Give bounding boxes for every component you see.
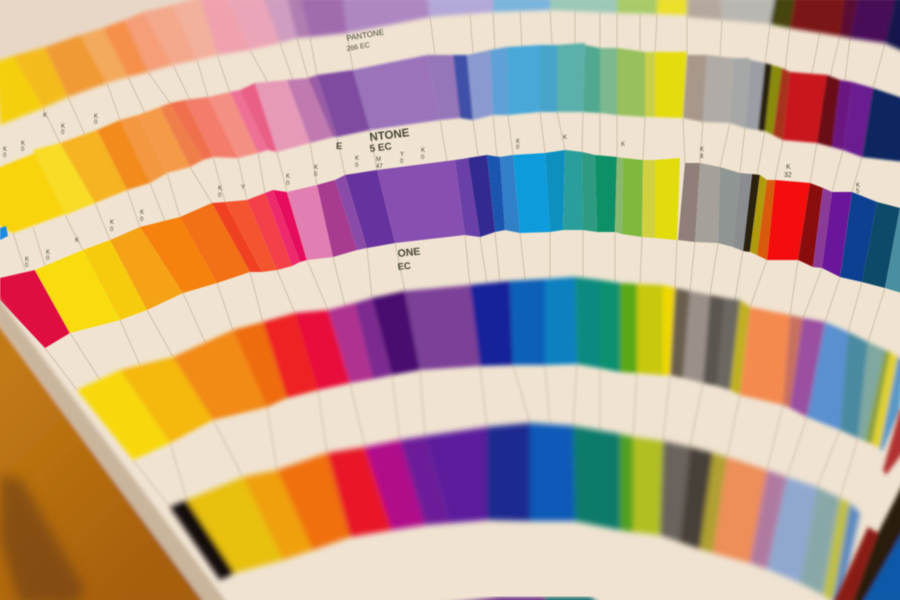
- swatch labels: pantone names: PANTONE: [346, 28, 385, 43]
- swatch labels: cmyk values: 0: [94, 120, 98, 126]
- swatch labels: cmyk values: 47: [376, 164, 383, 170]
- swatch labels: cmyk values: K: [516, 139, 520, 145]
- swatch labels: cmyk values: K: [421, 148, 425, 154]
- swatch labels: cmyk values: 0: [25, 263, 29, 269]
- swatch labels: cmyk values: M: [376, 157, 381, 163]
- swatch labels: cmyk values: K: [856, 183, 860, 189]
- swatch labels: pantone names: 266 EC: [346, 42, 370, 53]
- swatch labels: cmyk values: 0: [46, 256, 50, 262]
- swatch labels: pantone names: ONE: [397, 246, 421, 260]
- swatch labels: pantone names: E: [336, 141, 342, 152]
- swatch labels: pantone names: 5 EC: [369, 141, 392, 155]
- swatch labels: cmyk values: K: [110, 220, 114, 226]
- swatch labels: cmyk values: Y: [400, 152, 404, 158]
- swatch labels: cmyk values: K: [21, 141, 25, 147]
- colour row A: top row: [0, 0, 900, 125]
- book cover: lower left: [0, 294, 228, 600]
- colour row C: third row: [0, 150, 900, 348]
- swatch labels: cmyk values: 0: [21, 147, 25, 153]
- swatch labels: cmyk values: 8: [700, 154, 704, 160]
- swatch labels: cmyk values: K: [75, 238, 79, 244]
- swatch labels: cmyk values: 0: [355, 163, 359, 169]
- swatch labels: cmyk values: 0: [110, 227, 114, 233]
- swatch labels: cmyk values: K: [218, 186, 222, 192]
- swatch labels: cmyk values: K: [355, 156, 359, 162]
- swatch labels: pantone names: [336, 28, 421, 273]
- colour row D: fourth row: [77, 277, 900, 460]
- swatch labels: cmyk values: K: [43, 113, 47, 119]
- swatch labels: cmyk values: 0: [218, 193, 222, 199]
- swatch labels: cmyk values: 0: [286, 181, 290, 187]
- swatch labels: cmyk values: 0: [421, 155, 425, 161]
- swatch labels: cmyk values: K: [140, 210, 144, 216]
- colour row F: bottom edge hint: [440, 597, 600, 600]
- swatch labels: cmyk values: K: [25, 257, 29, 263]
- swatch labels: cmyk values: 32: [784, 172, 792, 179]
- swatch labels: pantone names: NTONE: [369, 127, 410, 144]
- swatch labels: cmyk values: Y: [241, 185, 245, 191]
- swatch labels: cmyk values: K: [621, 142, 625, 148]
- swatch labels: pantone names: EC: [397, 261, 412, 273]
- swatch labels: cmyk values: 0: [400, 159, 404, 165]
- book cover: blurred printed lettering: [0, 475, 85, 600]
- swatch labels: cmyk values: 0: [140, 217, 144, 223]
- colour row B: second row: [0, 43, 900, 233]
- swatch labels: cmyk values: 0: [314, 172, 318, 178]
- swatch labels: cmyk values: K: [286, 174, 290, 180]
- bottom right corner: other fan pages: [833, 410, 900, 600]
- swatch labels: cmyk values: K: [314, 165, 318, 171]
- swatch labels: cmyk values: 0: [3, 153, 7, 159]
- swatch labels: cmyk values: K: [786, 164, 791, 171]
- swatch labels: cmyk values: 5: [856, 189, 860, 195]
- swatch labels: cmyk values: K: [94, 114, 98, 120]
- swatch labels: cmyk values: 0: [516, 145, 520, 151]
- swatch labels: cmyk values: 0: [61, 130, 65, 136]
- swatch labels: cmyk values: K: [46, 250, 50, 256]
- colour row E: fifth row: [170, 423, 860, 600]
- swatch labels: cmyk values: K: [700, 147, 704, 153]
- swatch labels: cmyk values: K: [563, 135, 567, 141]
- swatch labels: cmyk values: [3, 113, 860, 269]
- swatch labels: cmyk values: K: [61, 124, 65, 130]
- swatch labels: cmyk values: K: [3, 147, 7, 153]
